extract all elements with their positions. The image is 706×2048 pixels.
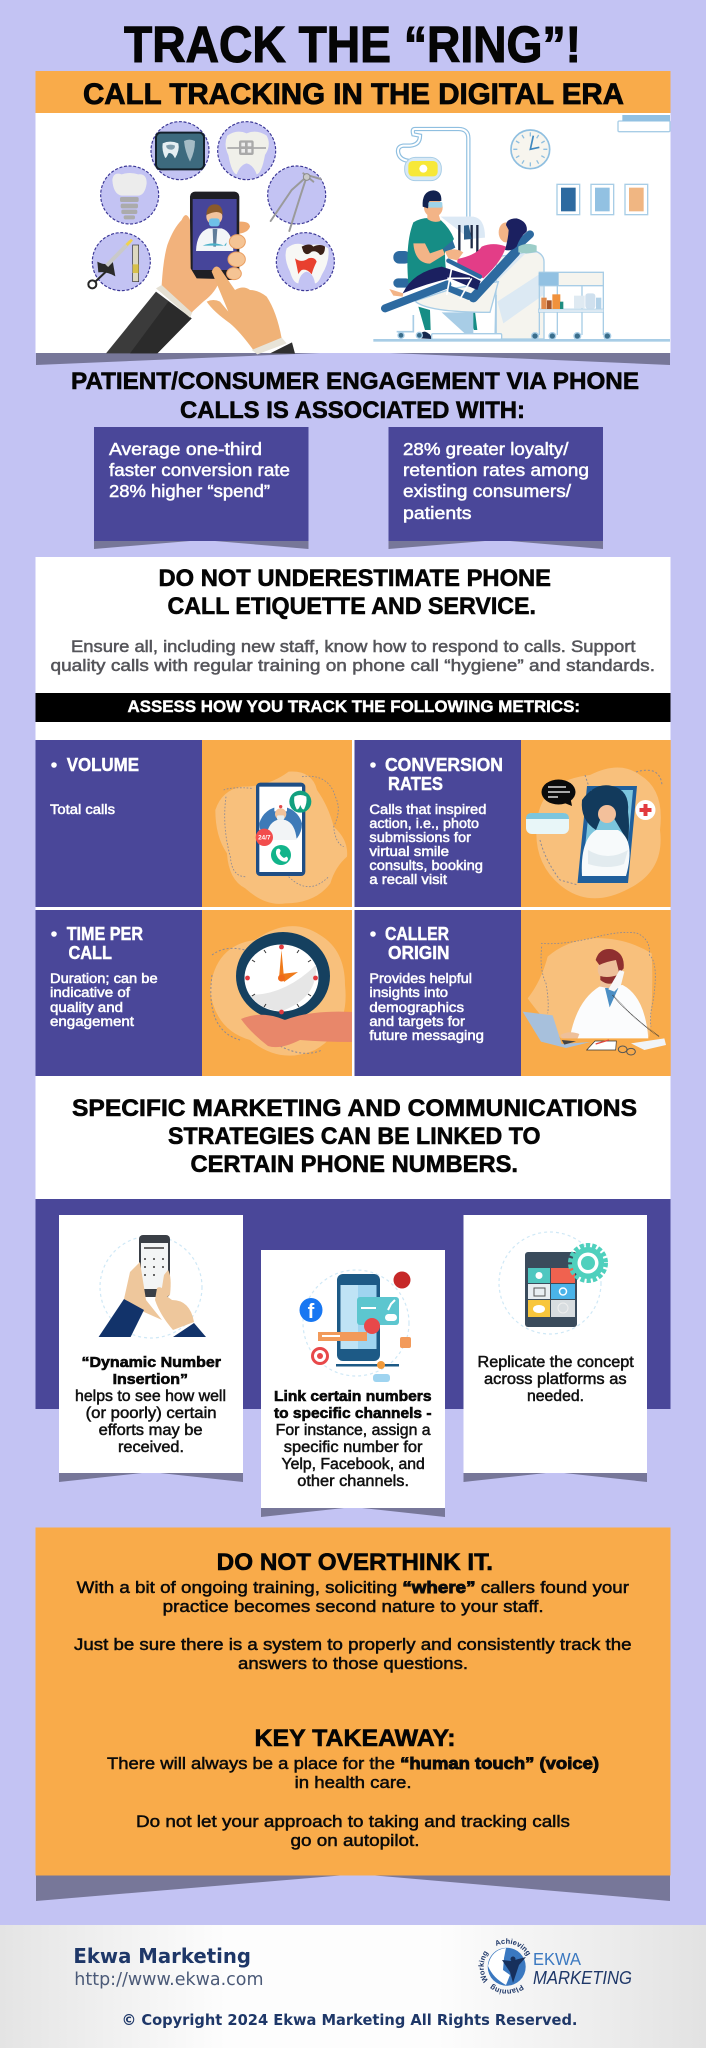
panel: loyalty stats: 28% greater loyalty/ [403,439,569,459]
illustration: dentist treating patient in chair [373,115,670,342]
metric panel: conversion rates: virtual smile [369,844,449,859]
panel: marketing strategies heading [36,1076,670,1199]
overthink paragraph [74,1578,632,1673]
metric panel: caller origin: CALLER [385,924,449,944]
heading: etiquette: DO NOT UNDERESTIMATE PHONE [158,565,551,592]
footer website: http://www.ekwa.com [74,1969,264,1990]
metric panel: caller origin: Provides helpful [369,971,472,986]
overthink paragraph: With a bit of ongoing training, soliciting “where” callers found your [77,1578,629,1597]
panel: loyalty stats: existing consumers/ [403,481,571,501]
footer copyright: © Copyright 2024 Ekwa Marketing All Rights Reserved. [122,2011,577,2029]
metric panel: time per call: engagement [50,1014,134,1029]
icon: clock in hand [210,926,352,1056]
takeaway paragraph [107,1754,599,1850]
takeaway paragraph: There will always be a place for the “human touch” (voice) [107,1754,599,1773]
metric panel: time per call: indicative of [50,985,130,1000]
metric panel: volume: VOLUME [67,755,139,775]
etiquette paragraph [50,638,655,675]
overthink paragraph: Just be sure there is a system to properly and consistently track the [74,1635,632,1654]
etiquette paragraph: Ensure all, including new staff, know how to respond to calls. Support [71,638,636,656]
takeaway paragraph: Do not let your approach to taking and tracking calls [136,1812,570,1831]
metric panel: volume [36,740,352,907]
icon: doctor on video call [526,768,662,898]
metric panel: caller origin: ORIGIN [388,943,450,963]
card: dynamic number insertion: helps to see how well [75,1388,226,1405]
metric panel: conversion rates: consults, booking [369,858,483,873]
panel: marketing strategies heading: SPECIFIC MARKETING AND COMMUNICATIONS [72,1095,637,1122]
panel: loyalty stats: retention rates among [403,460,589,480]
metric panel: time per call: TIME PER [67,924,143,944]
overthink paragraph: answers to those questions. [238,1654,468,1673]
title: TRACK THE “RING”! [124,16,581,73]
card: dynamic number insertion: “Dynamic Number [82,1354,221,1371]
heading: patient engagement: PATIENT/CONSUMER ENGAGEMENT VIA PHONE [71,368,639,395]
metric panel: conversion rates [354,740,671,907]
card: link numbers to channels: to specific channels - [274,1405,432,1422]
footer [0,1925,706,2048]
black banner: metrics [36,693,670,722]
metric panel: conversion rates: Calls that inspired [369,802,486,817]
metric panel: time per call: Duration; can be [50,971,158,986]
panel: conversion and spend stats: Average one-third [109,439,262,459]
logo: Ekwa Marketing: MARKETING [533,1968,632,1988]
card: dynamic number insertion [59,1215,243,1482]
panel: white metrics grid backing [36,740,670,1076]
metric panel: conversion rates: action, i.e., photo [369,816,479,831]
panel: loyalty stats [388,427,603,549]
metric panel: time per call: quality and [50,1000,123,1015]
purple band behind cards [36,1199,670,1409]
card: link numbers to channels: For instance, assign a [276,1422,431,1439]
panel: conversion and spend stats: 28% higher “spend” [109,481,270,501]
heading: key takeaway: KEY TAKEAWAY: [254,1725,456,1752]
metric panel: time per call: CALL [68,943,112,963]
metric panel: caller origin [354,910,671,1076]
metric panel: time per call [36,910,352,1076]
heading: etiquette: CALL ETIQUETTE AND SERVICE. [168,593,536,620]
metric panel: caller origin: insights into [369,985,448,1000]
illustration: hand holding phone with dental icons [88,122,334,354]
panel: do not overthink it and key takeaway [36,1528,670,1901]
card: link numbers to channels: Yelp, Facebook, and [282,1456,425,1473]
logo: Ekwa Marketing: Achieving [496,1938,530,1956]
card: dynamic number insertion: (or poorly) certain [86,1405,217,1422]
panel: marketing strategies heading: STRATEGIES CAN BE LINKED TO [168,1123,540,1150]
takeaway paragraph: go on autopilot. [290,1831,420,1850]
card: dynamic number insertion: received. [118,1439,184,1456]
card: replicate across platforms: Replicate the concept [478,1354,635,1371]
heading: etiquette [158,565,551,620]
icon: doctor on phone call [215,772,347,904]
logo: Ekwa Marketing: Planning [490,1984,524,1994]
card: link numbers to channels [261,1250,445,1517]
logo: Ekwa Marketing: EKWA [533,1949,581,1969]
panel: conversion and spend stats: faster conversion rate [109,460,290,480]
icon: phone with social channels [300,1270,411,1382]
icon: hands dialing phone [99,1235,206,1338]
icon: phone with app tiles and gear [499,1232,605,1334]
metric panel: conversion rates: CONVERSION [385,755,503,775]
card: dynamic number insertion: Insertion” [113,1371,188,1388]
card: link numbers to channels: specific number for [284,1439,422,1456]
card: replicate across platforms: across platforms as [484,1371,627,1388]
takeaway paragraph: in health care. [295,1773,412,1792]
icon: phone with social channels: f [308,1301,315,1323]
footer company name: Ekwa Marketing [73,1944,251,1968]
panel: marketing strategies heading: CERTAIN PHONE NUMBERS. [190,1151,518,1178]
panel: loyalty stats: patients [403,503,472,523]
panel: phone etiquette [36,557,670,740]
etiquette paragraph: quality calls with regular training on phone call “hygiene” and standards. [50,657,655,675]
metric panel: caller origin: demographics [369,1000,464,1015]
card: link numbers to channels: Link certain numbers [274,1388,432,1405]
subtitle: CALL TRACKING IN THE DIGITAL ERA [83,78,624,111]
metric panel: caller origin: future messaging [369,1028,484,1043]
metric panel: volume: Total calls [50,802,115,817]
black banner: metrics: ASSESS HOW YOU TRACK THE FOLLOWING METRICS: [128,697,580,716]
panel: hero [36,71,670,365]
card: replicate across platforms: needed. [527,1388,584,1405]
metric panel: caller origin: and targets for [369,1014,466,1029]
card: replicate across platforms [464,1215,647,1482]
icon: doctor on telephone at desk [523,932,666,1055]
overthink paragraph: practice becomes second nature to your staff. [163,1597,544,1616]
panel: conversion and spend stats [94,427,308,549]
heading: do not overthink it: DO NOT OVERTHINK IT. [217,1549,493,1576]
logo: Ekwa Marketing [478,1938,632,1994]
logo: Ekwa Marketing: Working [478,1951,489,1984]
metric panel: conversion rates: submissions for [369,830,472,845]
card: dynamic number insertion: efforts may be [99,1422,203,1439]
heading: patient engagement [71,368,639,424]
metric panel: conversion rates: RATES [388,774,443,794]
heading: patient engagement: CALLS IS ASSOCIATED WITH: [180,397,525,424]
card: link numbers to channels: other channels. [297,1473,409,1490]
icon: doctor on phone call: 24/7 [258,835,271,842]
metric panel: conversion rates: a recall visit [369,872,447,887]
